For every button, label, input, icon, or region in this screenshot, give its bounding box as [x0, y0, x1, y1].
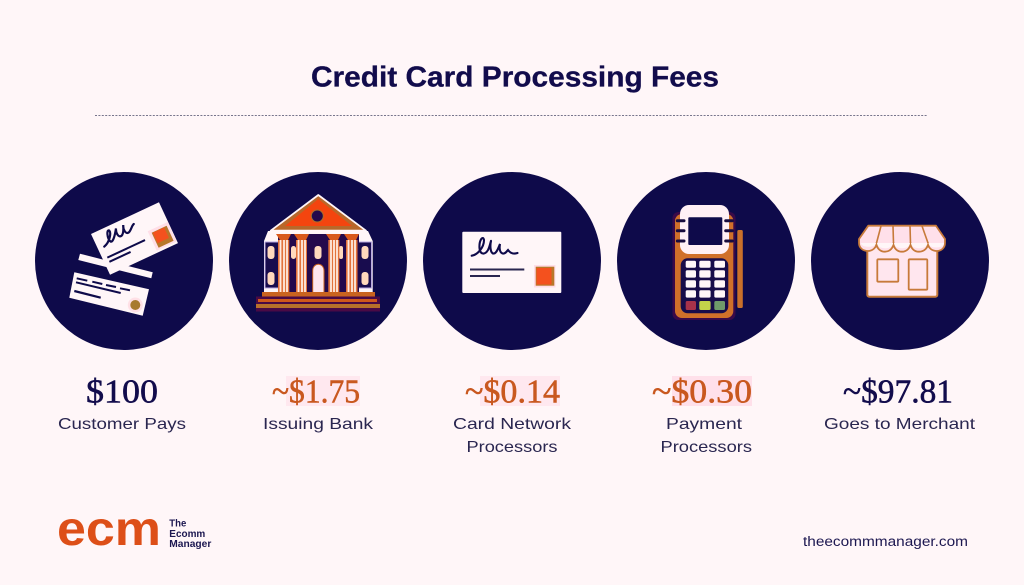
icon: credit card — [423, 172, 601, 350]
icon: bank building — [229, 172, 407, 350]
label: card network processors — [453, 416, 572, 456]
label: issuing bank: Issuing Bank — [263, 416, 374, 433]
logo name — [169, 518, 211, 550]
logo name: Ecomm — [169, 528, 205, 540]
panel: card network processors — [423, 172, 601, 456]
amount: $100: $100 — [86, 374, 158, 410]
panel: goes to merchant — [811, 172, 989, 433]
amount: ~$97.81: ~$97.81 — [843, 374, 953, 410]
label: card network processors: Processors — [466, 439, 558, 456]
label: goes to merchant: Goes to Merchant — [824, 416, 976, 433]
icon: storefront — [811, 172, 989, 350]
icon: card terminal — [617, 172, 795, 350]
panel: issuing bank — [229, 172, 407, 433]
website url: theecommmanager.com — [803, 534, 968, 549]
amount: ~$0.14: ~$0.14 — [465, 374, 560, 410]
logo name: Manager — [169, 538, 211, 550]
logo: ecm — [57, 503, 211, 556]
panel: customer pays — [35, 172, 213, 433]
logo name: The — [169, 518, 186, 530]
amount: ~$1.75: ~$1.75 — [272, 374, 360, 410]
panel: payment processors — [617, 172, 795, 456]
label: payment processors: Processors — [660, 439, 752, 456]
label: payment processors — [660, 416, 752, 456]
title: Credit Card Processing Fees — [311, 62, 719, 94]
label: customer pays: Customer Pays — [58, 416, 186, 433]
logo wordmark: ecm — [57, 503, 161, 556]
label: payment processors: Payment — [666, 416, 743, 433]
amount: ~$0.30: ~$0.30 — [652, 374, 752, 410]
icon: credit cards — [35, 172, 213, 350]
label: card network processors: Card Network — [453, 416, 572, 433]
